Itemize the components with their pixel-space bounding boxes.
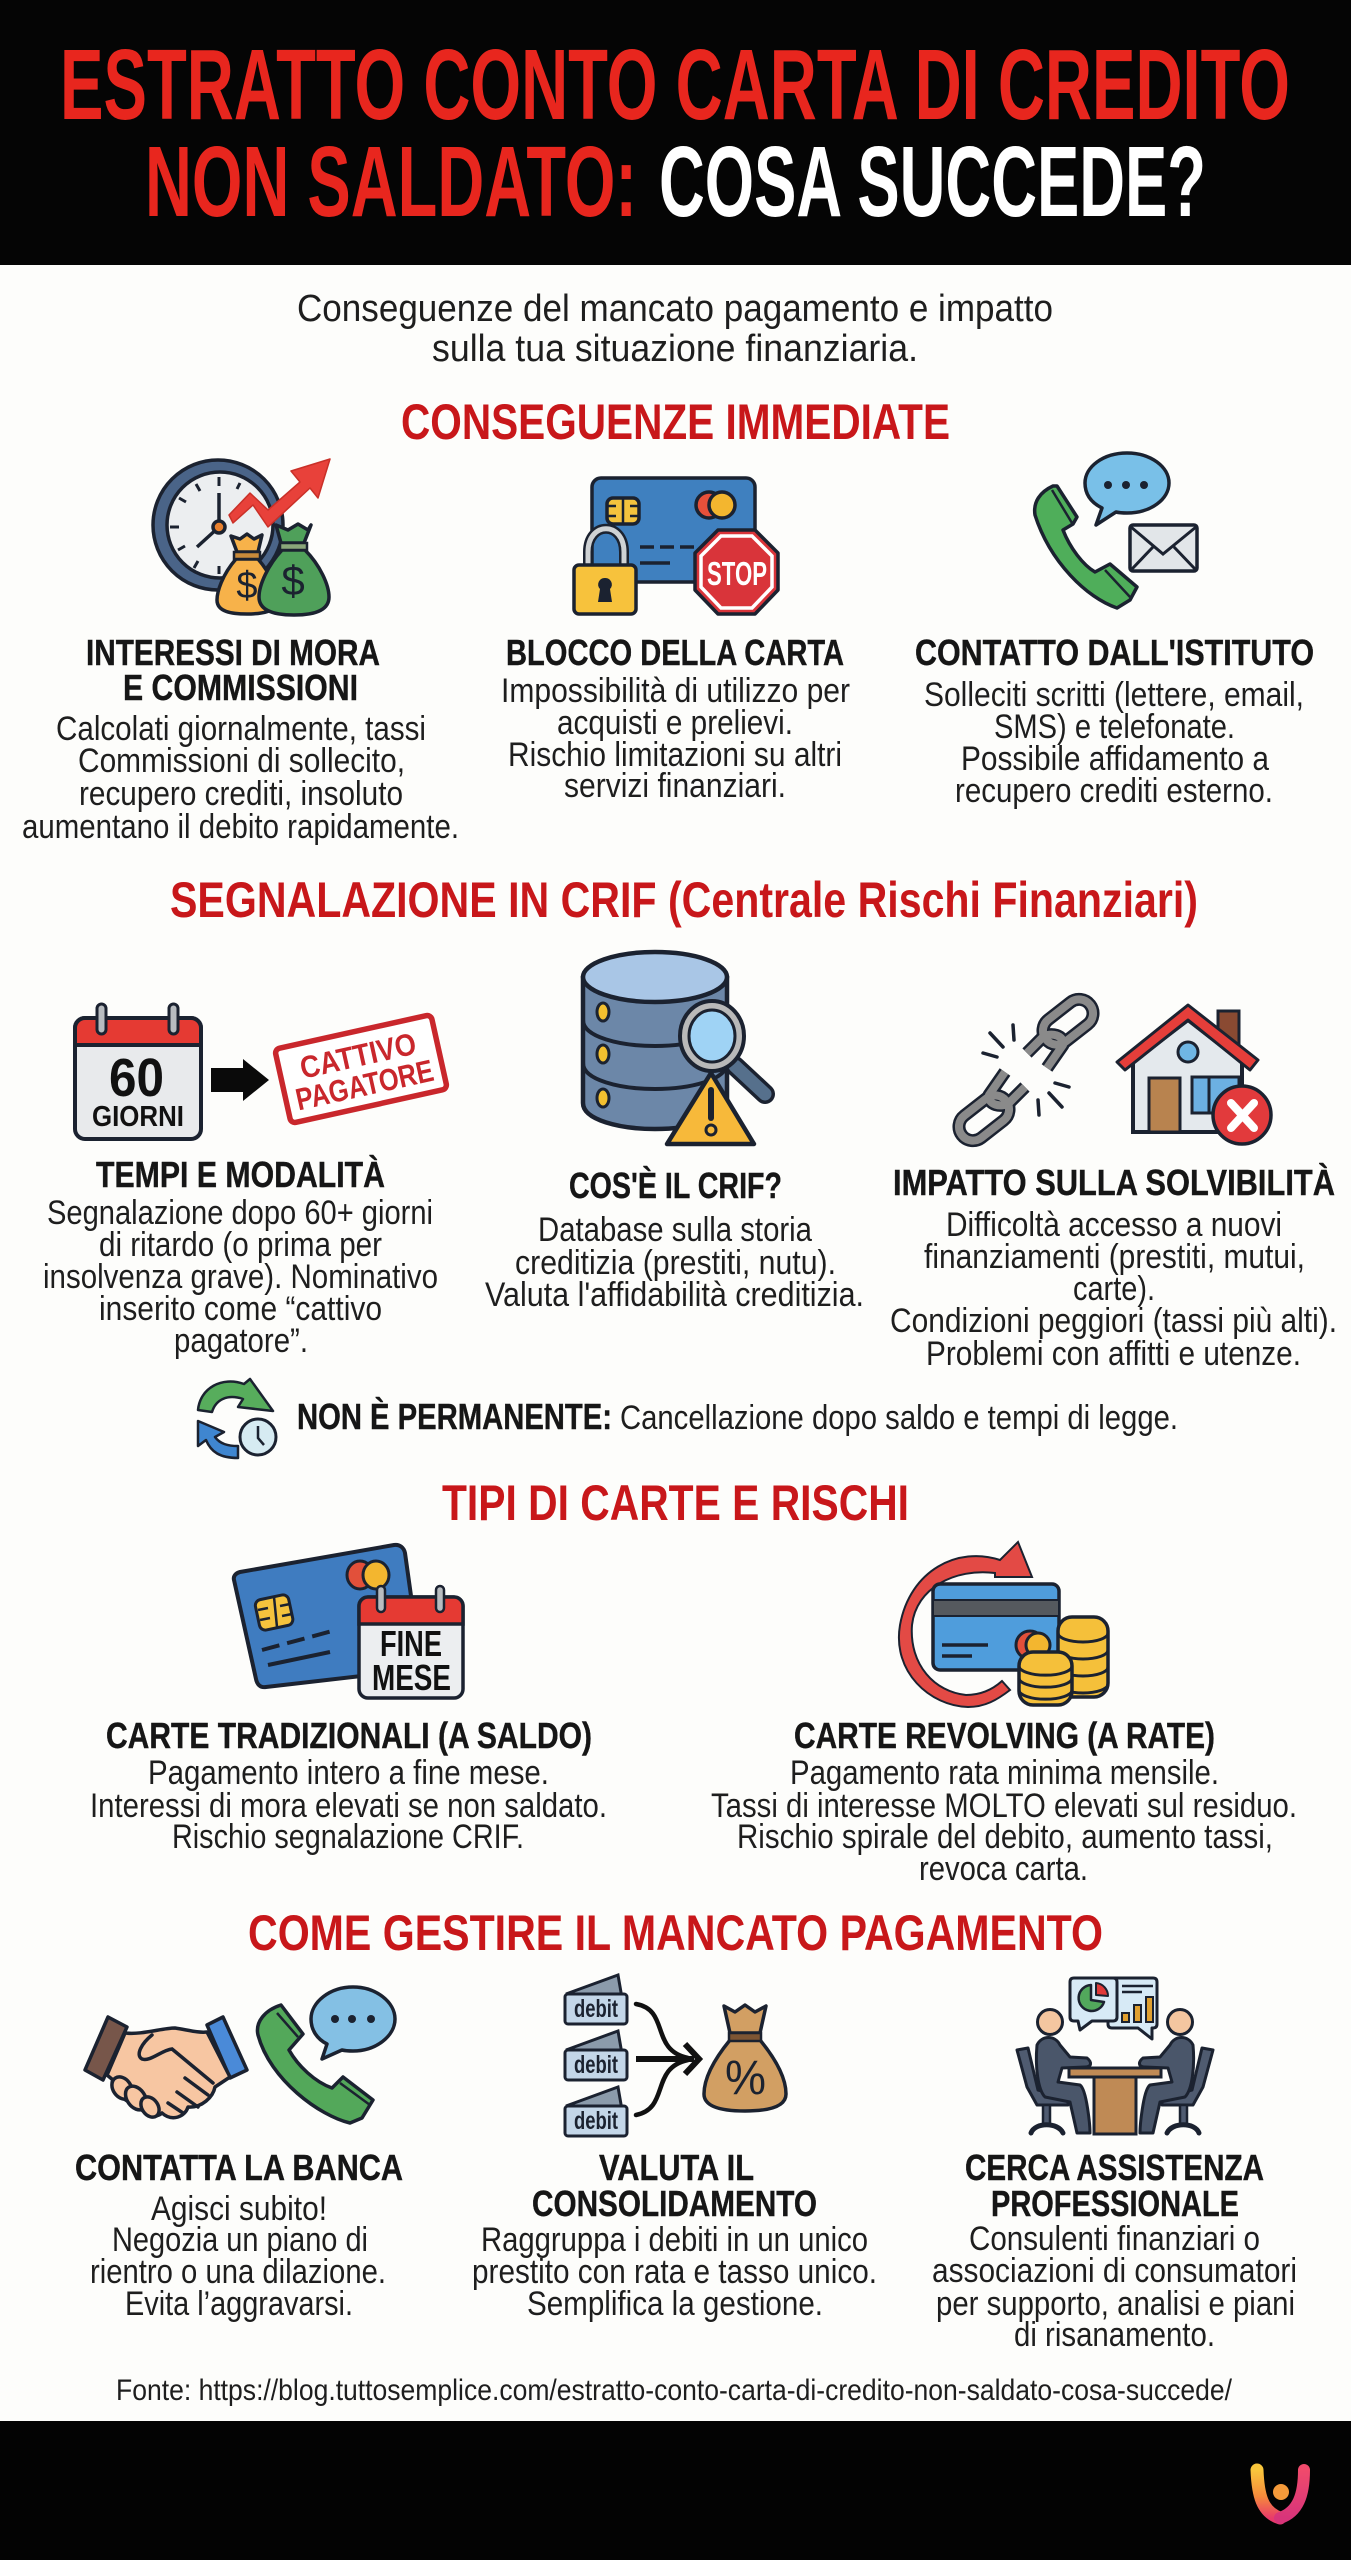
source line: Fonte: https://blog.tuttosemplice.com/estratto-conto-carta-di-credito-non-saldato-cosa-succede/ [116,2374,1233,2407]
icon: card, padlock and stop sign [574,478,778,614]
footer band [0,2421,1351,2560]
heading: INTERESSI DI MORA [86,632,380,673]
body text: insolvenza grave). Nominativo [43,1258,438,1296]
heading: E COMMISSIONI [123,667,358,708]
body text: associazioni di consumatori [932,2252,1297,2290]
subtitle: sulla tua situazione finanziaria. [432,328,918,370]
body text: pagatore”. [174,1322,308,1360]
body text: recupero crediti esterno. [955,772,1273,810]
icon: phone and bubble [257,1987,395,2123]
icon: debit cards merging into percent bag [565,1975,786,2136]
heading: tipi di carte e rischi: TIPI DI CARTE E RISCHI [442,1475,909,1531]
body text: Difficoltà accesso a nuovi [946,1206,1282,1244]
body text: di risanamento. [1014,2316,1215,2354]
body text: servizi finanziari. [564,767,786,805]
icon: cycle arrows and clock [198,1379,276,1458]
panel: blocco della carta [501,478,850,805]
body text: Solleciti scritti (lettere, email, [924,676,1304,714]
body text [485,1211,864,1314]
icon: tilted card and fine mese calendar: MESE [372,1657,451,1698]
panel: interessi di mora [22,459,459,846]
heading: BLOCCO DELLA CARTA [506,632,844,673]
icon: calendar 60 giorni [75,1004,201,1139]
body text: acquisti e prelievi. [557,704,793,742]
body text: aumentano il debito rapidamente. [22,808,459,846]
stamp: cattivo pagatore [275,1015,447,1123]
icon: broken chain [953,994,1099,1146]
icon: debit cards merging into percent bag: debit [574,1995,618,2023]
body text [890,1206,1337,1373]
stamp: cattivo pagatore: PAGATORE [292,1053,437,1117]
body text: per supporto, analisi e piani [936,2285,1295,2323]
body text: creditizia (prestiti, nutu). [515,1244,836,1282]
body text: Pagamento intero a fine mese. [148,1754,549,1792]
arrow [211,1059,269,1101]
panel: valuta il consolidamento [472,1975,877,2323]
icon: calendar 60 giorni: GIORNI [92,1101,184,1133]
body text: carte). [1073,1270,1155,1308]
stamp: cattivo pagatore: CATTIVO [297,1026,419,1086]
title: NON SALDATO: [145,126,637,238]
subtitle: Conseguenze del mancato pagamento e impatto [297,288,1053,330]
icon: calendar 60 giorni: 60 [109,1048,164,1108]
body text: Segnalazione dopo 60+ giorni [47,1194,433,1232]
body text: Commissioni di sollecito, [78,742,405,780]
body text [43,1194,438,1360]
body text: Negozia un piano di [112,2221,368,2259]
heading: PROFESSIONALE [991,2183,1239,2224]
icon: logo [1257,2470,1304,2518]
heading: CERCA ASSISTENZA [965,2147,1264,2188]
heading: come gestire il mancato pagamento: COME GESTIRE IL MANCATO PAGAMENTO [248,1905,1103,1961]
panel: carte revolving [711,1542,1297,1888]
body text: Calcolati giornalmente, tassi [56,710,426,748]
heading: CARTE REVOLVING (A RATE) [794,1715,1215,1756]
body text [90,2190,386,2323]
heading [86,632,380,708]
header band with title [0,0,1351,265]
body text: recupero crediti, insoluto [79,775,403,813]
callout text: Cancellazione dopo saldo e tempi di legge. [620,1399,1178,1437]
body text: Agisci subito! [151,2190,327,2228]
body text: Impossibilità di utilizzo per [501,672,850,710]
heading [532,2147,817,2224]
icon: debit cards merging into percent bag: % [725,2052,766,2105]
body text: revoca carta. [919,1850,1088,1888]
body text [932,2220,1297,2354]
body text: Pagamento rata minima mensile. [790,1754,1219,1792]
panel: contatta la banca [75,1987,403,2323]
body text: Valuta l'affidabilità creditizia. [485,1276,864,1314]
body text: SMS) e telefonate. [994,708,1235,746]
body text [22,710,459,846]
heading [965,2147,1264,2224]
heading: VALUTA IL [599,2147,754,2188]
body text: inserito come “cattivo [99,1290,382,1328]
heading: conseguenze immediate: CONSEGUENZE IMMEDIATE [401,394,950,450]
body text [90,1754,607,1856]
icon: clock, arrow and money bags: $ [236,565,258,607]
panel: carte tradizionali [90,1545,607,1856]
body text: Consulenti finanziari o [969,2220,1260,2258]
icon: tilted card and fine mese calendar [234,1545,463,1698]
title [60,29,1290,238]
icon: card, padlock and stop sign: STOP [707,555,767,592]
icon: clock, arrow and money bags: $ [281,557,305,604]
body text: finanziamenti (prestiti, mutui, [924,1238,1305,1276]
body text: Problemi con affitti e utenze. [926,1335,1301,1373]
body text: di ritardo (o prima per [99,1226,382,1264]
heading: COS'È IL CRIF? [569,1165,782,1206]
body text: prestito con rata e tasso unico. [472,2253,877,2291]
body text: Interessi di mora elevati se non saldato. [90,1787,607,1825]
callout: non e permanente [198,1379,1178,1458]
icon: clock, arrow and money bags [153,459,330,615]
icon: consultation meeting [1017,1978,1213,2134]
heading: CONSOLIDAMENTO [532,2183,817,2224]
subtitle [297,288,1053,370]
body text: Semplifica la gestione. [527,2285,823,2323]
body text: Raggruppa i debiti in un unico [481,2221,868,2259]
body text [711,1754,1297,1888]
heading: CARTE TRADIZIONALI (A SALDO) [106,1715,592,1756]
panel: contatto dall'istituto [915,453,1314,810]
body text: rientro o una dilazione. [90,2253,386,2291]
heading: CONTATTA LA BANCA [75,2147,403,2188]
icon: phone, speech bubble and envelope [1035,453,1197,608]
body text [924,676,1304,810]
body text: Rischio limitazioni su altri [508,736,842,774]
heading: TEMPI E MODALITÀ [96,1154,385,1195]
icon: tilted card and fine mese calendar: FINE [380,1623,442,1664]
body text: Rischio segnalazione CRIF. [172,1818,524,1856]
body text: Database sulla storia [538,1211,812,1249]
body text: Possibile affidamento a [961,740,1269,778]
panel: cos'e il crif [485,952,864,1314]
icon: debit cards merging into percent bag: debit [574,2107,618,2135]
callout text [297,1396,1178,1437]
panel: cerca assistenza professionale [932,1978,1297,2354]
panel: impatto sulla solvibilita [890,994,1337,1373]
icon: house with X [1117,1005,1271,1144]
body text [501,672,850,805]
callout text: NON È PERMANENTE: [297,1396,612,1437]
icon: database, magnifier and warning [583,952,765,1144]
body text: Evita l’aggravarsi. [125,2285,353,2323]
icon: debit cards merging into percent bag: debit [574,2051,618,2079]
panel: tempi e modalita [43,1004,447,1360]
icon: handshake [85,2017,247,2121]
body text [472,2221,877,2323]
icon: circular arrow, card and coins [899,1542,1108,1707]
body text: Rischio spirale del debito, aumento tassi, [737,1818,1273,1856]
